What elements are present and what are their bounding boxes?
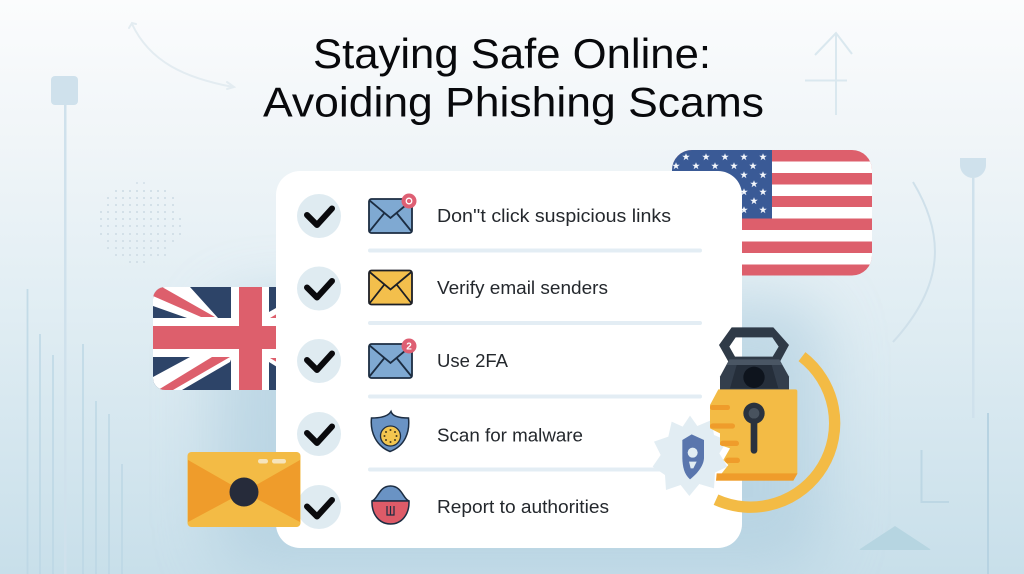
yellow ring (716, 357, 835, 507)
background decoration: left pole (51, 76, 78, 574)
row 3: use 2FA: 2 (406, 342, 412, 352)
title (263, 30, 764, 126)
row 4: scan for malware: Scan for malware (437, 426, 583, 446)
row 3: use 2FA: Use 2FA (437, 351, 508, 371)
shield person icon (682, 434, 704, 479)
flag: United Kingdom (153, 287, 276, 390)
title: Staying Safe Online: (313, 30, 711, 77)
background decoration: vertical lines (28, 289, 122, 574)
panel: checklist card (276, 171, 742, 548)
lock body (710, 389, 797, 481)
starburst badge (653, 416, 727, 496)
background decoration: dot grid (100, 182, 181, 263)
row 1: don't click suspicious links (297, 194, 671, 238)
row 2: verify email senders (297, 266, 608, 310)
icon: yellow envelope with seal (188, 452, 300, 527)
row 1: don't click suspicious links: Don''t click suspicious links (437, 206, 671, 226)
divider lines (368, 248, 702, 472)
row 2: verify email senders: Verify email senders (437, 278, 608, 298)
flag: United States (672, 150, 872, 276)
lock head (720, 359, 789, 390)
icon: padlock with ring and badge (653, 327, 835, 507)
row 5: report to authorities (297, 485, 609, 529)
shackle (719, 327, 789, 362)
background decoration: triangle (860, 526, 930, 550)
keyhole (743, 403, 765, 424)
title: Avoiding Phishing Scams (263, 78, 764, 126)
row 4: scan for malware (297, 412, 583, 456)
background decoration: curved arc (893, 182, 935, 342)
background decoration: curved arrow (129, 23, 234, 89)
background decoration: corner bracket (922, 450, 949, 502)
row 5: report to authorities: Report to authorities (437, 497, 609, 517)
background decoration: right line (987, 413, 989, 574)
background decoration: up arrow (805, 33, 852, 115)
background decoration: right pole with cup (960, 158, 986, 418)
row 3: use 2FA (297, 338, 508, 383)
